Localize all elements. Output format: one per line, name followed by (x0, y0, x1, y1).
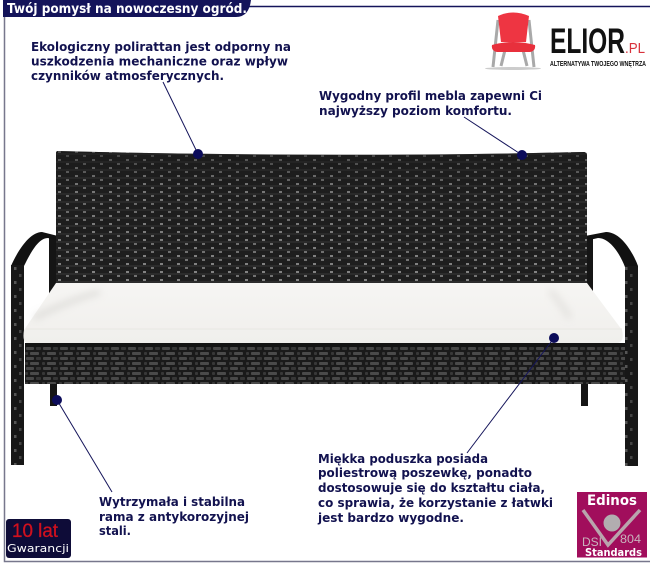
callout: poduszka: Miękka poduszka posiada (318, 452, 488, 466)
illustration: rattan sofa (11, 151, 638, 466)
icon: red chair (485, 12, 541, 70)
callout: rama: rama z antykorozyjnej (99, 510, 249, 524)
logo: Elior: .PL (625, 40, 645, 57)
callout: polirattan: czynników atmosferycznych. (31, 69, 224, 83)
badge: Edinos standards: DSI (582, 535, 602, 549)
sofa backrest (56, 151, 587, 290)
callout: polirattan (31, 40, 291, 159)
badge: Edinos standards (577, 492, 647, 559)
callout: profil mebla (319, 89, 542, 160)
callout: profil mebla: najwyższy poziom komfortu. (319, 104, 512, 118)
callout: poduszka (317, 333, 559, 525)
sofa lower rail (25, 343, 625, 384)
callout: polirattan: uszkodzenia mechaniczne oraz wpływ (31, 54, 288, 68)
callout: profil mebla: Wygodny profil mebla zapewni Ci (319, 89, 542, 103)
badge: 10 lat gwarancji: Gwarancji (7, 542, 69, 555)
callout: polirattan: Ekologiczny polirattan jest odporny na (31, 40, 291, 54)
callout: rama: Wytrzymała i stabilna (99, 495, 245, 509)
callout: poduszka: poliestrową poszewkę, ponadto (318, 466, 532, 480)
badge: Edinos standards: Edinos (587, 493, 637, 509)
callout: rama (52, 395, 249, 538)
seat cushion (24, 283, 623, 343)
callout: rama: stali. (99, 524, 131, 538)
badge: Edinos standards: Standards (585, 547, 642, 559)
title bar: Twój pomysł na nowoczesny ogród. (7, 2, 247, 17)
badge: 10 lat gwarancji (6, 519, 71, 558)
callout: poduszka: dostosowuje się do kształtu ciała, (318, 481, 545, 495)
sofa arms and legs (11, 232, 638, 466)
callout: poduszka: co sprawia, że korzystanie z łatwki (318, 496, 553, 510)
logo: Elior (485, 12, 646, 70)
callout: poduszka: jest bardzo wygodne. (317, 511, 464, 525)
badge: 10 lat gwarancji: 10 lat (12, 521, 59, 542)
badge: Edinos standards: 804 (620, 532, 641, 546)
